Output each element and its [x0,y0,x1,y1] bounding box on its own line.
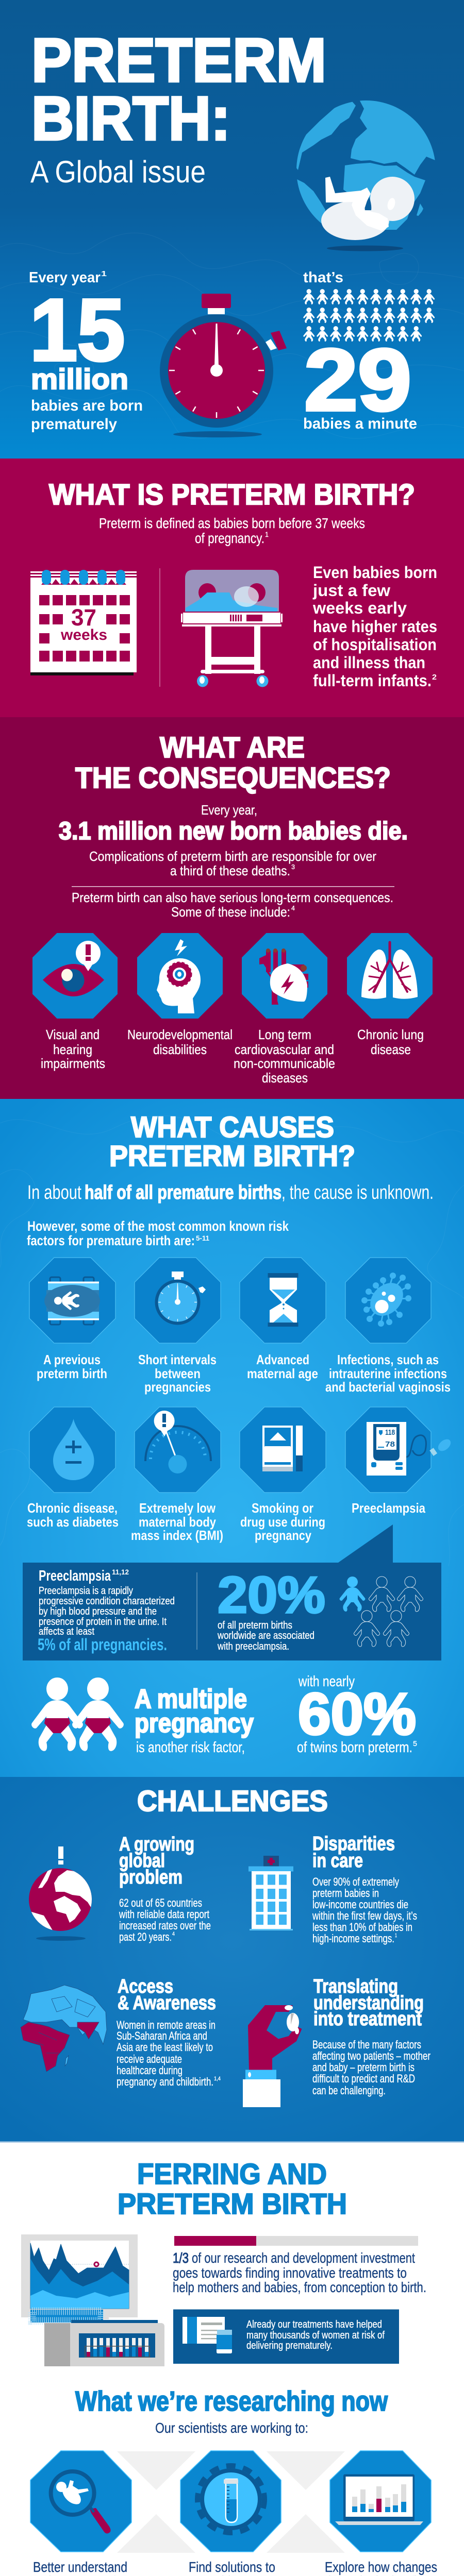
text: consequence labels [41,1027,424,1086]
text: risk labels row 1: maternal age [247,1366,318,1381]
text: preeclampsia description: 5% of all pregnancies. [38,1635,167,1654]
topographic pattern [0,233,464,438]
text: access and awareness: Women in remote areas in [117,2019,216,2031]
heading: ferring and preterm birth [118,2158,347,2221]
text: risk factors intro: However, some of the most common known risk [27,1218,289,1234]
text: deaths statistic: a third of these deaths. [170,863,290,878]
text: preeclampsia description [38,1568,175,1654]
icon: heart [242,933,327,1019]
panel: treatments callout: delivering prematurely. [246,2340,333,2351]
text: even babies born: have higher rates [313,617,437,636]
panel: consequences [0,717,464,1099]
text: 60 percent of twins: with nearly [298,1673,355,1690]
text: disparities in care: preterm babies in [312,1887,379,1900]
icon: one in five babies [340,1577,423,1647]
text: risk factors intro: factors for premature birth are: [27,1233,195,1248]
text: a growing global problem: problem [119,1867,183,1888]
icon: twins [31,1677,124,1751]
text: deaths statistic: 3.1 million new born babies die. [59,818,408,845]
text: translating understanding into treatment: understanding [313,1992,424,2014]
icon: document and bottle [183,2317,232,2353]
icon: head with gear [137,933,223,1019]
heading: what we're researching now: What we’re researching now [75,2386,388,2417]
text: preeclampsia description: Preeclampsia is a rapidly [39,1585,133,1597]
text: 60 percent of twins: 5 [413,1739,417,1748]
text: long-term consequences: Some of these include: [171,904,290,920]
globe shadow [327,245,403,251]
icon: crimson globe [29,1846,95,1941]
icon: previous preterm birth [29,1258,115,1343]
icon: world map [21,1985,107,2072]
text: that's 29 babies a minute: that’s [303,269,343,286]
text: even babies born [312,563,437,690]
text: research labels: Explore how changes [325,2559,437,2575]
text: a growing global problem: global [119,1850,165,1872]
text: definition [99,515,365,546]
text: 20 percent statistic: with preeclampsia. [217,1641,289,1652]
text: risk labels row 2: mass index (BMI) [131,1528,223,1543]
text: disparities in care: less than 10% of babies in [312,1921,412,1934]
icon: blood pressure monitor: 118 [385,1428,395,1437]
icon: fetus [321,177,415,240]
text: translating understanding into treatment: Because of the many factors [312,2038,421,2051]
text: even babies born: just a few [312,581,390,600]
text: consequence labels: Visual and [46,1027,100,1042]
text: access and awareness: & Awareness [118,1992,216,2014]
text: access and awareness: Access [118,1976,173,1997]
text: disparities in care: Disparities [312,1833,395,1855]
text: translating understanding into treatment: Translating [313,1976,398,1997]
text: access and awareness: Sub-Saharan Africa and [117,2029,207,2042]
text: one third of investment [173,2250,426,2295]
heading: challenges: CHALLENGES [137,1785,328,1818]
text: 20 percent statistic [217,1566,325,1652]
text: risk labels row 1: preterm birth [37,1366,107,1381]
panel: challenges [0,1777,464,2141]
text: 20 percent statistic: of all preterm births [218,1620,292,1631]
text: long-term consequences [72,890,393,920]
text: preeclampsia description: affects at least [39,1626,94,1637]
text: translating understanding into treatment: affecting two patients – mother [312,2049,430,2062]
text: even babies born: of hospitalisation [313,635,437,654]
text: consequence labels: Long term [258,1027,311,1042]
text: definition: of pregnancy. [195,530,264,546]
text: risk labels row 2: Chronic disease, [27,1500,118,1516]
text: research labels [33,2559,437,2576]
icon: hospital [248,1856,293,1930]
text: disparities in care: within the first few days, it’s [312,1909,417,1922]
text: that's 29 babies a minute: babies a minute [303,415,417,432]
text: consequence labels: Neurodevelopmental [127,1027,233,1042]
heading: what causes preterm birth: WHAT CAUSES [131,1111,334,1144]
heading: what causes preterm birth: PRETERM BIRTH? [109,1140,355,1173]
icon: blood pressure monitor [345,1407,453,1493]
text: consequence labels: hearing [53,1042,92,1057]
text: access and awareness [117,1976,221,2088]
text: risk labels row 1 [37,1352,451,1395]
text: a multiple pregnancy [135,1684,254,1756]
text: definition: Preterm is defined as babies born before 37 weeks [99,515,365,531]
text: consequence labels: impairments [41,1056,105,1071]
text: 60 percent of twins: of twins born preterm. [297,1739,412,1756]
text: risk labels row 1: Advanced [256,1352,309,1367]
text: even babies born: full-term infants. [313,671,432,690]
icon: laptop with bar chart [330,2451,431,2552]
title: PRETERM [31,26,326,95]
text: disparities in care: in care [312,1850,363,1872]
text: risk labels row 2: Smoking or [252,1500,313,1516]
text: preeclampsia description: progressive condition characterized [39,1596,175,1607]
text: disparities in care: Over 90% of extremely [312,1875,399,1888]
text: a growing global problem [119,1834,211,1943]
text: half of all premature births [27,1182,434,1204]
text: access and awareness: healthcare during [117,2064,183,2077]
text: translating understanding into treatment: and baby – preterm birth is [312,2061,415,2074]
panel: what is preterm birth [0,459,464,717]
icon: bacteria [345,1258,431,1343]
text: definition: 1 [265,530,269,538]
topographic pattern [0,1115,464,1566]
text: risk labels row 2: pregnancy [255,1528,311,1543]
panel: ferring and preterm birth [0,2141,464,2576]
icon: diabetes drop [29,1407,115,1493]
text: one third of investment: goes towards finding innovative treatments to [173,2265,407,2281]
icon: hand with pill [243,2005,302,2107]
text: preeclampsia description: presence of protein in the urine. It [39,1616,167,1628]
text: access and awareness: receive adequate [117,2053,182,2065]
text: a growing global problem: increased rates over the [119,1919,211,1932]
icon: blood pressure monitor: 78 [385,1440,395,1449]
text: 20 percent statistic: 20% [218,1566,325,1624]
decorative triangles [117,2451,345,2553]
icon: calendar 37 weeks [30,570,137,675]
text: access and awareness: Asia are the least likely to [117,2041,213,2054]
text: consequence labels: Chronic lung [357,1027,424,1042]
text: preeclampsia description: Preeclampsia [39,1568,111,1584]
icon: stopwatch small [135,1258,221,1343]
text: deaths statistic: 3 [291,863,295,871]
icon: cigarettes [240,1407,326,1493]
text: risk labels row 2: drug use during [240,1514,325,1530]
icon: magnifying glass with fetus [30,2451,131,2552]
text: even babies born: Even babies born [313,563,437,582]
text: consequence labels: diseases [262,1070,308,1086]
heading: ferring and preterm birth: FERRING AND [137,2158,327,2191]
text: preeclampsia description: 11,12 [112,1568,129,1576]
text: 15 million [29,269,143,433]
text: risk labels row 1: Infections, such as [337,1352,439,1367]
text: 15 million: prematurely [31,416,117,433]
text: access and awareness: pregnancy and childbirth. [117,2075,213,2088]
text: preeclampsia description: by high blood pressure and the [39,1606,157,1617]
text: consequence labels: cardiovascular and [235,1042,334,1057]
text: access and awareness: 1,4 [214,2076,221,2082]
text: a growing global problem: 4 [172,1931,175,1937]
heading: what are the consequences: WHAT ARE [160,731,305,764]
icon: calendar 37 weeks: weeks [60,626,107,643]
icon: BMI gauge [135,1407,221,1493]
panel: treatments callout [173,2309,399,2364]
icon: lungs [347,933,433,1019]
text: a growing global problem: with reliable data report [119,1908,209,1921]
text: risk labels row 2: such as diabetes [27,1514,119,1530]
text: translating understanding into treatment [312,1976,430,2097]
text: a multiple pregnancy: is another risk factor, [136,1739,245,1756]
text: translating understanding into treatment: can be challenging. [312,2084,386,2097]
icon: grid of 29 babies [303,289,435,342]
icon: hourglass [240,1258,326,1343]
text: deaths statistic [59,802,408,878]
text: consequence labels: disease [371,1042,411,1057]
text: a growing global problem: 62 out of 65 countries [119,1896,202,1909]
text: risk labels row 2: Preeclampsia [352,1500,425,1516]
text: disparities in care [312,1833,417,1945]
text: half of all premature births: half of all premature births [85,1182,281,1204]
icon: stopwatch [160,294,287,437]
text: disparities in care: 1 [395,1933,397,1939]
text: risk labels row 1: Short intervals [138,1352,217,1367]
text: a growing global problem: A growing [119,1834,194,1855]
text: 15 million: 1 [101,269,107,278]
text: risk labels row 2 [27,1500,425,1543]
text: translating understanding into treatment: into treatment [313,2008,422,2030]
title: A Global issue [30,155,206,189]
text: a growing global problem: past 20 years. [119,1930,172,1943]
icon: calendar 37 weeks: 37 [71,604,96,631]
text: risk labels row 1: A previous [43,1352,101,1367]
text: risk labels row 1: between [155,1366,201,1381]
text: even babies born: 2 [432,673,437,682]
text: long-term consequences: 4 [291,904,295,912]
text: one third of investment: 1/3 [173,2250,189,2266]
text: risk labels row 2: Extremely low [139,1500,216,1516]
text: a multiple pregnancy: A multiple [135,1684,247,1714]
icon: gear with test tube [180,2451,281,2552]
icon: lab machine with chart [21,2234,164,2366]
icon: globe with baby [294,98,443,251]
text: even babies born: weeks early [312,599,407,617]
text: disparities in care: high-income settings. [312,1932,394,1945]
text: consequence labels: disabilities [153,1042,207,1057]
title: BIRTH: [31,84,230,153]
text: risk labels row 1: pregnancies [144,1379,211,1395]
icon: incubator [181,570,283,687]
text: translating understanding into treatment: difficult to predict and R&D [312,2072,415,2085]
panel: treatments callout: many thousands of women at risk of [246,2330,385,2341]
panel: hero background [0,0,464,459]
text: 15 million: babies are born [31,397,143,414]
heading: what is preterm birth: WHAT IS PRETERM BIRTH? [49,478,415,511]
text: half of all premature births: In about [27,1182,81,1204]
text: 15 million: Every year [29,269,101,286]
title [30,26,326,189]
text: our scientists: Our scientists are working to: [155,2420,308,2436]
panel: treatments callout: Already our treatments have helped [246,2319,382,2330]
text: 15 million: 15 [30,281,125,379]
text: that's 29 babies a minute [303,269,417,432]
panel: what causes preterm birth [0,1099,464,1777]
text: 20 percent statistic: worldwide are associated [217,1630,314,1641]
bar chart: one third of R&D [174,2236,418,2246]
text: disparities in care: low-income countries die [312,1898,408,1911]
text: deaths statistic: Every year, [201,802,257,818]
text: deaths statistic: Complications of preterm birth are responsible for over [89,849,376,864]
text: long-term consequences: Preterm birth can also have serious long-term consequences. [72,890,393,905]
panel: preeclampsia callout [23,1524,441,1660]
text: risk factors intro: 5-11 [196,1234,209,1242]
text: 60 percent of twins: 60% [298,1682,416,1747]
text: consequence labels: non-communicable [234,1056,335,1071]
text: risk labels row 2: maternal body [139,1514,216,1530]
text: even babies born: and illness than [313,653,425,672]
heading: what are the consequences: THE CONSEQUENCES? [75,761,391,794]
text: research labels: Better understand [33,2559,127,2575]
text: that's 29 babies a minute: 29 [304,331,411,429]
text: 15 million: million [31,363,128,395]
text: research labels: Find solutions to [189,2559,275,2575]
heading: what causes preterm birth [109,1111,355,1173]
text: risk factors intro [27,1218,289,1248]
icon: eye [32,933,118,1019]
heading: ferring and preterm birth: PRETERM BIRTH [118,2188,347,2221]
text: a multiple pregnancy: pregnancy [135,1708,254,1738]
heading: what are the consequences [75,731,391,794]
